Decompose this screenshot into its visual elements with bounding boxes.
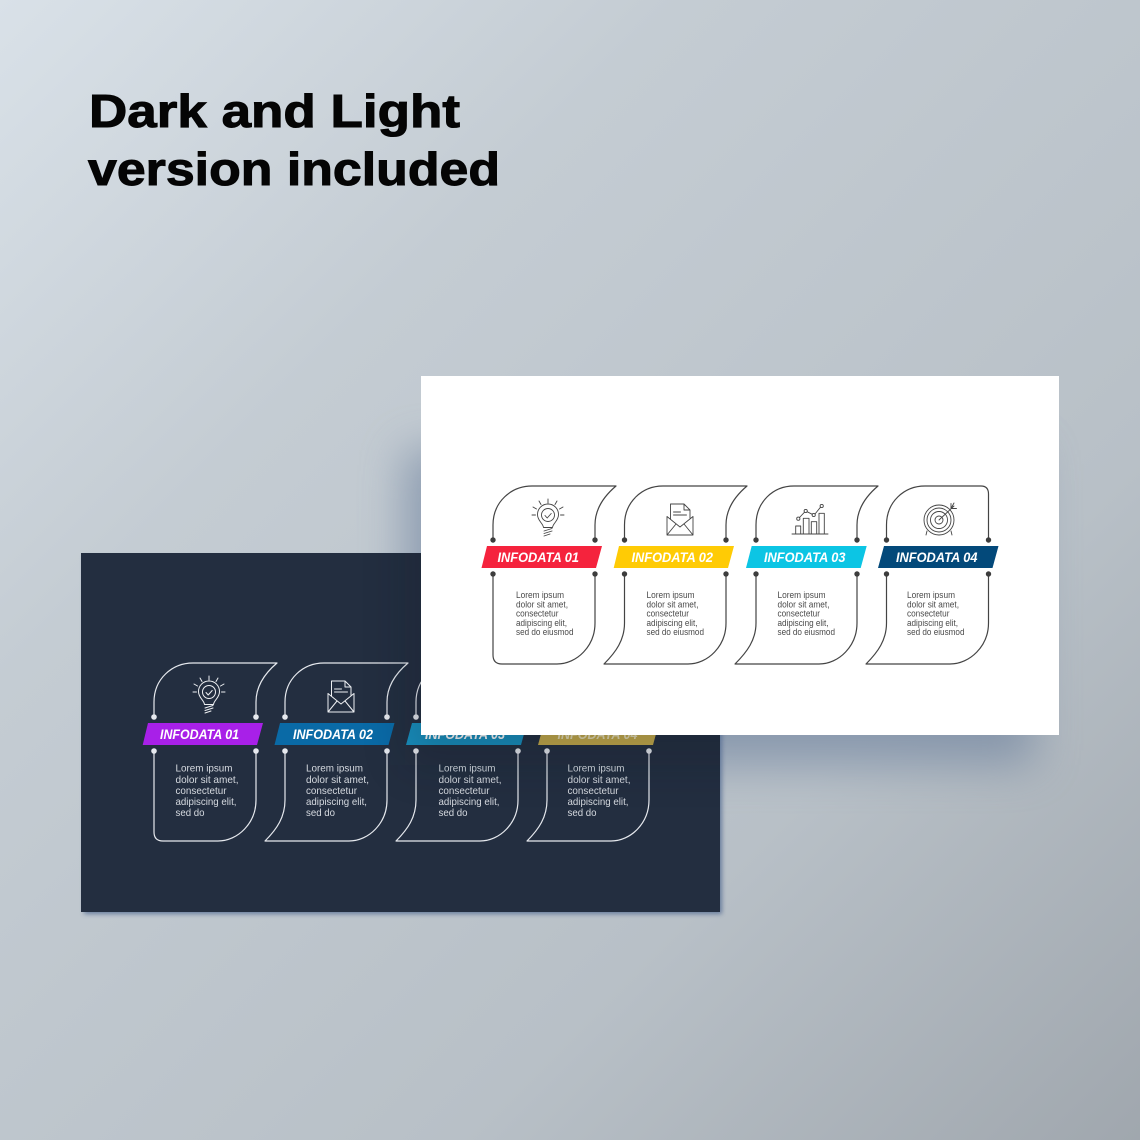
text: body 01: consectetur — [516, 609, 558, 619]
text: body 04: sed do — [568, 808, 597, 819]
text: body 02: sed do — [306, 808, 335, 819]
text: body 01: adipiscing elit, — [516, 618, 567, 628]
text: body 03 — [778, 590, 835, 637]
label: INFODATA 02 — [274, 723, 394, 745]
card: light 01 — [482, 486, 616, 664]
text: body 04: dolor sit amet, — [568, 775, 630, 786]
text: body 04: consectetur — [907, 609, 950, 619]
text: body 04: Lorem ipsum — [907, 590, 955, 600]
card: light 04 — [866, 486, 998, 664]
text: body 01: Lorem ipsum — [176, 764, 232, 774]
text: body 03 — [438, 764, 502, 819]
text: body 02: consectetur — [646, 609, 689, 619]
text: body 03: Lorem ipsum — [438, 764, 496, 774]
text: body 02: consectetur — [306, 786, 358, 797]
label: INFODATA 03 — [406, 723, 527, 745]
text: body 02: sed do eiusmod — [646, 627, 704, 637]
label: INFODATA 02: INFODATA 02 — [293, 727, 374, 742]
text: body 03: sed do eiusmod — [778, 627, 835, 637]
icon: light bulb — [532, 499, 564, 536]
label: INFODATA 01: INFODATA 01 — [160, 727, 239, 742]
text: body 04 — [907, 590, 964, 637]
text: body 02: adipiscing elit, — [646, 618, 698, 628]
text: body 02: dolor sit amet, — [646, 599, 698, 609]
text: body 03: dolor sit amet, — [438, 775, 502, 786]
card: light 03 — [735, 486, 878, 664]
title — [88, 85, 500, 195]
icon: envelope — [328, 681, 354, 712]
text: body 04: adipiscing elit, — [568, 797, 628, 808]
text: body 04: Lorem ipsum — [568, 764, 624, 774]
text: body 03: sed do — [438, 808, 468, 819]
text: body 01: adipiscing elit, — [176, 797, 236, 808]
text: body 02 — [306, 764, 369, 819]
title: version included — [88, 143, 500, 195]
icon: light bulb — [193, 676, 225, 713]
text: body 02: Lorem ipsum — [646, 590, 694, 600]
panel: light version — [421, 376, 1059, 735]
card: dark 04 — [527, 723, 659, 841]
text: body 03: adipiscing elit, — [438, 797, 500, 808]
card: dark 02 — [265, 663, 408, 841]
card: dark 03 — [396, 663, 539, 841]
card: dark 01 — [143, 663, 277, 841]
icon: target — [924, 503, 956, 535]
label: INFODATA 04: INFODATA 04 — [558, 727, 638, 742]
text: body 03: adipiscing elit, — [778, 618, 828, 628]
text: body 01: Lorem ipsum — [516, 590, 564, 600]
text: body 01: sed do eiusmod — [516, 627, 574, 637]
label: INFODATA 02: INFODATA 02 — [632, 550, 714, 565]
text: body 01: dolor sit amet, — [176, 775, 238, 786]
panel: dark version — [81, 553, 720, 912]
label: INFODATA 03: INFODATA 03 — [764, 550, 846, 565]
text: body 04 — [568, 764, 630, 819]
text: body 01: consectetur — [176, 786, 227, 797]
label: INFODATA 01 — [143, 723, 263, 745]
text: body 01 — [516, 590, 574, 637]
title: Dark and Light — [89, 85, 460, 137]
text: body 03: dolor sit amet, — [778, 599, 830, 609]
text: body 02: dolor sit amet, — [306, 775, 369, 786]
text: body 02 — [646, 590, 704, 637]
text: body 01 — [176, 764, 238, 819]
text: body 04: sed do eiusmod — [907, 627, 964, 637]
card: light 02 — [604, 486, 747, 664]
text: body 02: adipiscing elit, — [306, 797, 367, 808]
text: body 01: dolor sit amet, — [516, 599, 568, 609]
label: INFODATA 02 — [614, 546, 734, 568]
text: body 03: consectetur — [778, 609, 820, 619]
light panel shadow — [405, 450, 1035, 765]
text: body 03: Lorem ipsum — [778, 590, 826, 600]
label: INFODATA 03: INFODATA 03 — [425, 727, 506, 742]
label: INFODATA 04 — [878, 546, 998, 568]
label: INFODATA 01 — [482, 546, 602, 568]
label: INFODATA 04: INFODATA 04 — [896, 550, 978, 565]
label: INFODATA 01: INFODATA 01 — [498, 550, 579, 565]
text: body 04: dolor sit amet, — [907, 599, 959, 609]
icon: bar chart — [792, 504, 828, 534]
label: INFODATA 03 — [746, 546, 867, 568]
text: body 03: consectetur — [438, 786, 490, 797]
text: body 02: Lorem ipsum — [306, 764, 363, 774]
text: body 04: adipiscing elit, — [907, 618, 958, 628]
text: body 01: sed do — [176, 808, 205, 819]
icon: envelope — [667, 504, 693, 535]
shadow cast on dark panel — [384, 662, 656, 786]
text: body 04: consectetur — [568, 786, 619, 797]
dark panel shadow — [84, 557, 722, 914]
